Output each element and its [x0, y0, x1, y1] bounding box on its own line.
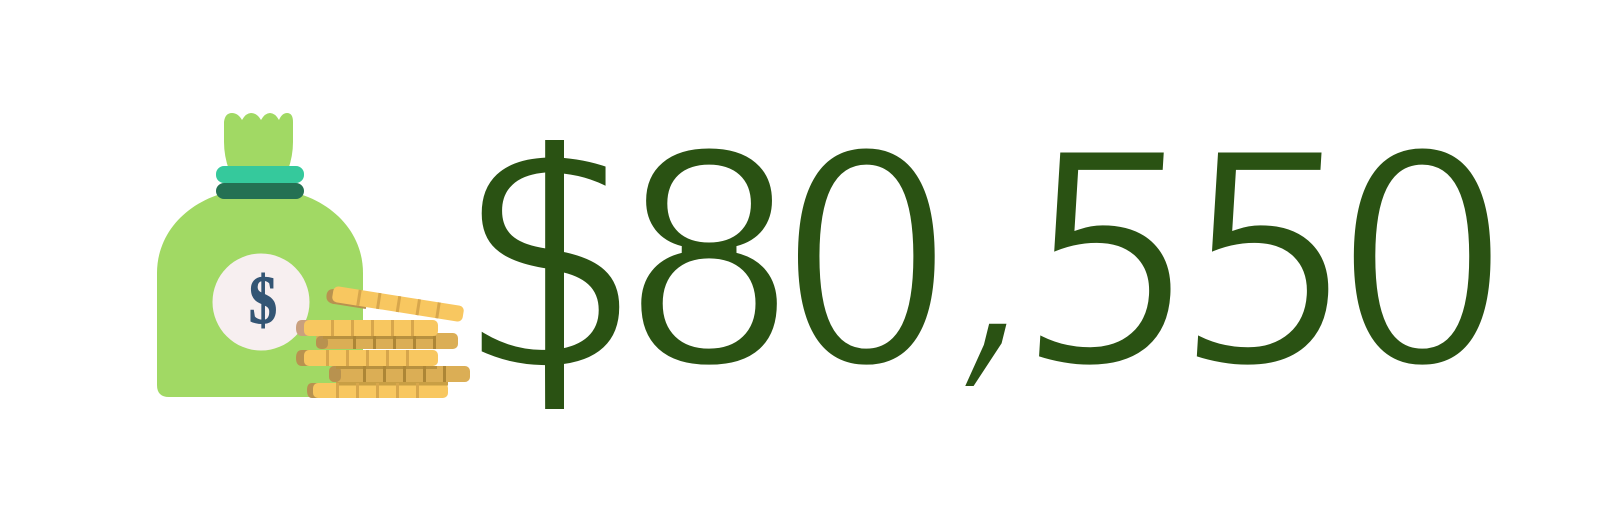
amount: $80,550: , [933, 83, 1093, 426]
dark green tie band [216, 183, 304, 199]
amount: $80,550: 55 [1009, 92, 1369, 434]
coin row 5 [307, 383, 320, 398]
tilted top coin [325, 285, 464, 324]
bag neck ruffle [224, 113, 293, 170]
coin row 2 [316, 333, 458, 349]
icon: money bag with coins [157, 113, 470, 398]
amount: $80,550: 800 [619, 91, 1513, 434]
bag body [157, 188, 363, 397]
coin row 1 [296, 320, 312, 336]
coin row 3 [296, 350, 312, 366]
teal tie band [216, 166, 304, 183]
amount: $80,550 [482, 140, 1491, 409]
coin row 4 [329, 366, 470, 382]
dollar sign: $ [249, 262, 277, 338]
amount: $80,550: $ [452, 59, 648, 448]
coin stack [296, 285, 470, 398]
dollar badge [212, 254, 310, 350]
